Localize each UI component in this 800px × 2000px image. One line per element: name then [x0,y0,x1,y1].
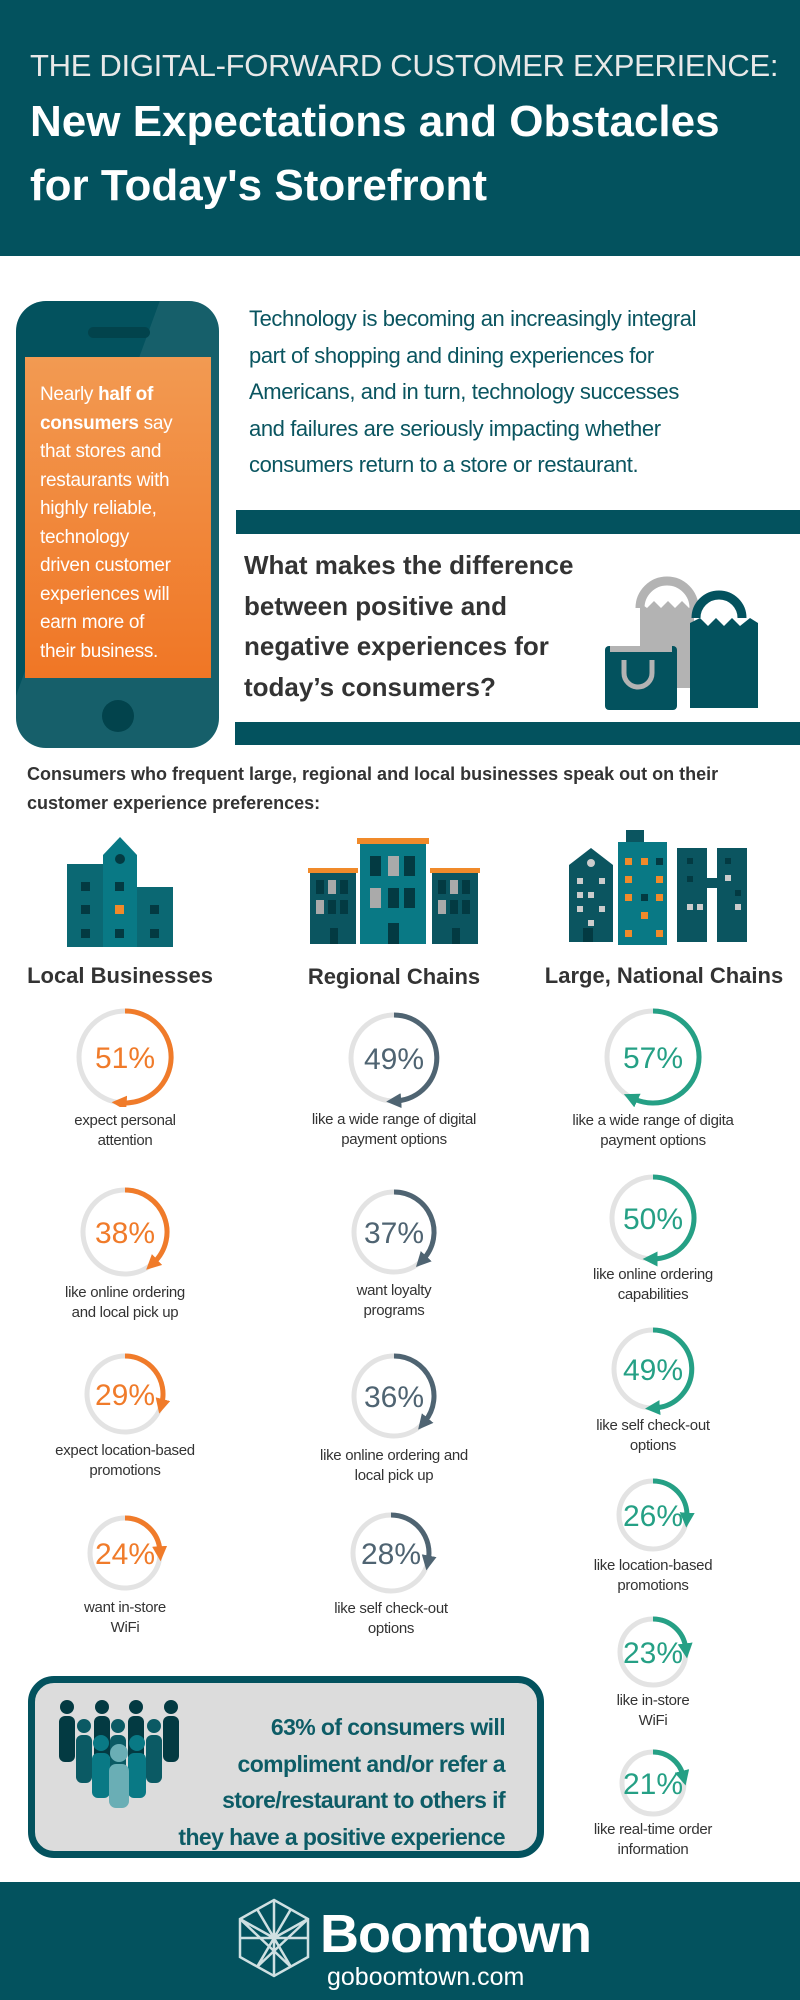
website: goboomtown.com [327,1963,524,1991]
phone screen text: driven customer [40,555,171,576]
ring: local 29%: 29% [95,1379,155,1412]
ring: regional 36%: 36% [364,1381,424,1414]
callout: 63% [28,1676,544,1858]
label: like online ordering and [320,1447,468,1464]
ring: local 38%: 38% [95,1217,155,1250]
ring: large 23%: 23% [623,1637,683,1670]
label: expect personal [74,1112,176,1129]
ring: large 50%: 50% [623,1203,683,1236]
label: attention [98,1132,152,1149]
label [572,1112,734,1149]
ring: large 49%: 49% [623,1354,683,1387]
ring: large 21% [620,1750,689,1816]
callout text: compliment and/or refer a [238,1750,505,1776]
label [320,1447,468,1484]
label: options [630,1437,676,1454]
callout text: 63% of consumers will [271,1714,505,1740]
section intro: Consumers who frequent large, regional and local businesses speak out on their customer experience preferences: [27,764,718,813]
label: WiFi [111,1619,139,1636]
intro paragraph [249,306,696,477]
ring: large 50% [610,1174,697,1266]
ring: regional 49% [348,1012,440,1108]
callout text [178,1714,506,1850]
ring: local 29% [84,1354,170,1434]
icon: shopping bags [605,576,758,710]
label: like self check-out [596,1417,710,1434]
label [594,1821,712,1858]
ring: regional 37%: 37% [364,1217,424,1250]
label: payment options [341,1131,447,1148]
label: like real-time order [594,1821,712,1838]
phone screen text: highly reliable, [40,498,157,519]
ring: local 24%: 24% [95,1538,155,1571]
label: want in-store [84,1599,166,1616]
label: promotions [617,1577,689,1594]
ring: regional 28%: 28% [361,1538,421,1571]
label [84,1599,166,1636]
heading: local: Local Businesses [27,963,213,988]
callout text: store/restaurant to others if [222,1787,505,1813]
label: like in-store [617,1692,689,1709]
label: programs [364,1302,424,1319]
label: like a wide range of digita [572,1112,734,1129]
phone screen text: their business. [40,640,158,662]
callout text: they have a positive experience [178,1824,505,1850]
intro paragraph: Technology is becoming an increasingly integral [249,306,696,331]
label [356,1282,432,1319]
phone screen text: technology [40,526,129,548]
title: New Expectations and Obstacles [30,97,720,146]
icon: logo hexagon [238,1898,310,1978]
header banner [0,0,800,256]
phone screen text [25,357,211,678]
title: for Today's Storefront [30,161,487,210]
ring: large 57%: 57% [623,1042,683,1075]
ring: local 51%: 51% [95,1042,155,1075]
phone screen text: restaurants with [40,470,169,490]
label [596,1417,710,1454]
ring: local 38% [80,1188,170,1276]
label: and local pick up [72,1304,178,1321]
footer [0,1882,800,2000]
ring: local 51% [76,1008,174,1107]
logo text: Boomtown [320,1904,591,1964]
subtitle: THE DIGITAL-FORWARD CUSTOMER EXPERIENCE: [30,48,778,83]
phone screen text: consumers say [40,412,172,434]
label [334,1600,448,1637]
label: information [618,1841,688,1858]
label: promotions [89,1462,161,1479]
label [617,1692,690,1729]
ring: large 21%: 21% [623,1768,683,1801]
phone screen text: Nearly half of [40,384,153,405]
ring: large 26%: 26% [623,1500,683,1533]
label: payment options [600,1132,706,1149]
intro paragraph: and failures are seriously impacting whether [249,416,661,440]
label: like online ordering [593,1266,713,1283]
label: expect location-based [55,1442,195,1459]
label: like self check-out [334,1600,448,1617]
icon: large chain buildings [569,830,747,945]
ring: large 49% [612,1328,694,1415]
label: WiFi [639,1712,667,1729]
label: want loyalty [357,1282,431,1299]
phone screen text: earn more of [40,612,144,633]
icon: regional buildings [308,838,480,944]
label: capabilities [618,1286,688,1303]
label [312,1111,476,1148]
label [55,1442,195,1479]
label [594,1557,712,1594]
label: like a wide range of digital [312,1111,476,1128]
ring: local 24% [88,1516,167,1590]
intro paragraph: part of shopping and dining experiences for [249,342,654,368]
label: options [368,1620,414,1637]
question heading: What makes the difference between positive and negative experiences for today’s consumers? [244,550,573,702]
heading: regional: Regional Chains [308,964,480,989]
phone screen text: that stores and [40,441,161,462]
label [74,1112,176,1149]
ring: regional 49%: 49% [364,1043,424,1076]
ring: regional 28% [350,1512,436,1594]
label [593,1266,713,1303]
ring: regional 36% [352,1354,436,1438]
heading: large: Large, National Chains [545,963,783,988]
intro paragraph: consumers return to a store or restaurant. [249,452,638,477]
phone screen text: experiences will [40,584,169,604]
label: like location-based [594,1557,712,1574]
phone [16,301,219,748]
icon: local building [67,837,173,947]
ring: large 57% [604,1008,702,1107]
label [65,1284,185,1321]
label: like online ordering [65,1284,185,1301]
ring: large 26% [616,1478,694,1552]
icon: people group [59,1700,179,1808]
intro paragraph: Americans, and in turn, technology successes [249,379,679,404]
ring: regional 37% [352,1190,437,1274]
ring: large 23% [618,1616,692,1688]
title [30,97,720,210]
label: local pick up [355,1467,433,1484]
